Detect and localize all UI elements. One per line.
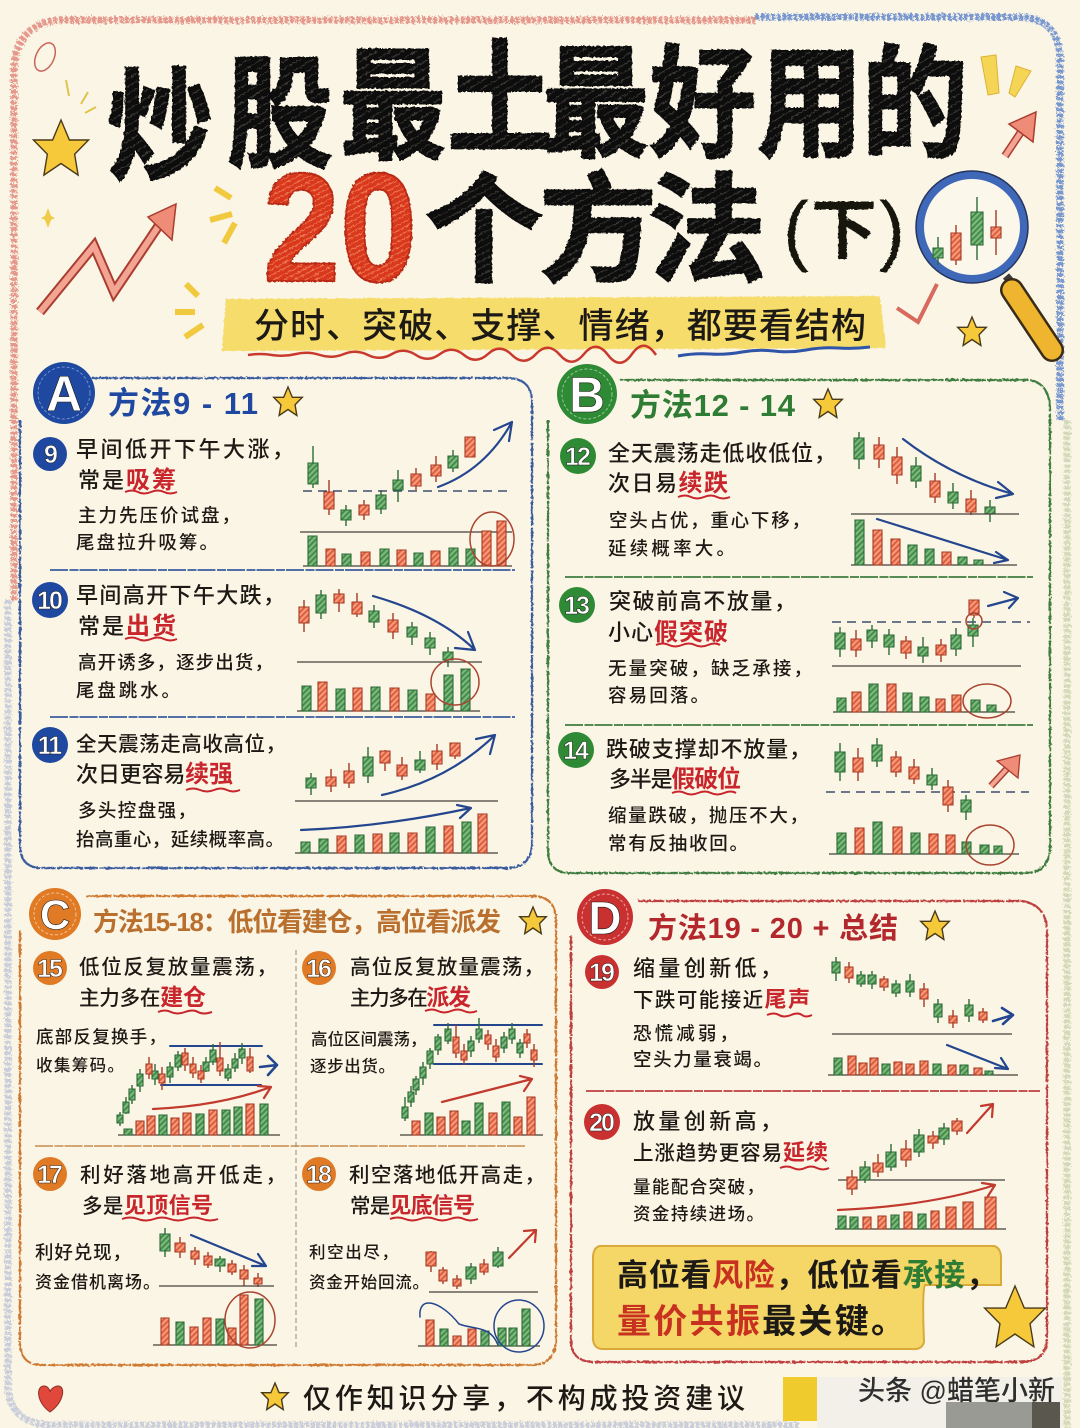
method 17: 利好兑现， — [35, 1242, 131, 1263]
method 14: 跌破支撑却不放量， — [606, 737, 811, 762]
method 15: 低位反复放量震荡， — [79, 956, 277, 979]
badge D — [577, 889, 633, 945]
method 18 — [302, 1157, 545, 1352]
icon: red arrow upper right — [1005, 112, 1036, 156]
panel B — [548, 364, 1050, 873]
candlestick chart 9 — [300, 422, 514, 566]
method 14: 缩量跌破，抛压不大， — [608, 805, 808, 826]
method 12 — [560, 432, 1019, 565]
title line 1: 炒股最土最好用的 — [107, 34, 968, 197]
method 17: 利好落地高开低走， — [80, 1164, 286, 1187]
method 9: 早间低开下午大涨， — [76, 437, 294, 462]
callout line 2: 量价共振最关键。 — [617, 1303, 905, 1341]
candlestick chart 10 — [297, 589, 482, 711]
method 12: 全天震荡走低收低位， — [608, 441, 836, 466]
candlestick chart 13 — [832, 592, 1030, 718]
panel D — [571, 889, 1047, 1362]
title block — [107, 34, 968, 314]
method 20: 资金持续进场。 — [633, 1204, 764, 1224]
method 15: 收集筹码。 — [36, 1056, 124, 1075]
method 9: 9 — [44, 441, 57, 469]
decorations left — [31, 40, 235, 337]
callout line 1: 高位看风险，低位看承接， — [617, 1258, 997, 1293]
method 19: 缩量创新低， — [633, 956, 782, 981]
method 17: 17 — [37, 1161, 62, 1189]
method 17 — [33, 1157, 286, 1348]
panel B heading: 方法12 - 14 — [630, 388, 796, 423]
method 9 — [33, 422, 514, 566]
title suffix: ( — [783, 185, 809, 273]
candlestick chart 17 — [153, 1228, 277, 1348]
method 12: 次日易续跌 — [608, 470, 728, 497]
icon: heart — [39, 1386, 63, 1412]
candlestick chart 19 — [828, 957, 1018, 1075]
title line 2: 个方法 — [425, 166, 766, 298]
method 18: 18 — [306, 1161, 332, 1189]
method 10: 高开诱多，逐步出货， — [78, 652, 273, 673]
panel C — [20, 888, 556, 1365]
method 10: 常是出货 — [78, 613, 176, 640]
method 16: 逐步出货。 — [310, 1057, 395, 1076]
method 20: 20 — [589, 1109, 614, 1137]
badge B — [557, 364, 617, 424]
star — [814, 389, 842, 418]
method 10 — [32, 582, 482, 711]
title suffix: 下 — [811, 193, 877, 267]
method 18: 利空出尽， — [309, 1243, 398, 1262]
icon: star left — [33, 120, 89, 175]
method 13: 小心假突破 — [608, 619, 728, 646]
watermark — [783, 1376, 1062, 1428]
icon: magnifying glass — [916, 171, 1052, 350]
method 10: 尾盘跳水。 — [76, 680, 180, 701]
method 15: 主力多在建仓 — [79, 984, 206, 1010]
method 14: 14 — [563, 737, 589, 765]
method 10: 早间高开下午大跌， — [76, 583, 285, 608]
method 11: 全天震荡走高收高位， — [76, 733, 286, 756]
candlestick chart 14 — [826, 738, 1029, 865]
badge B: B — [569, 367, 605, 423]
method 15: 底部反复换手， — [36, 1027, 166, 1047]
method 13: 突破前高不放量， — [609, 589, 796, 614]
footer note: 仅作知识分享，不构成投资建议 — [303, 1383, 745, 1414]
method 20: 量能配合突破， — [633, 1177, 764, 1197]
subtitle text: 分时、突破、支撑、情绪，都要看结构 — [254, 307, 866, 346]
method 20: 上涨趋势更容易延续 — [633, 1140, 828, 1165]
method 19: 恐慌减弱， — [633, 1023, 738, 1044]
method 11 — [32, 727, 498, 853]
method 15: 15 — [37, 955, 63, 983]
icon: check mark — [897, 284, 937, 322]
method 13 — [559, 587, 1030, 718]
method 11: 多头控盘强， — [78, 800, 196, 821]
title suffix: ) — [879, 185, 905, 273]
method 13: 13 — [564, 592, 589, 620]
candlestick chart 12 — [851, 432, 1019, 565]
candlestick chart 15 — [117, 1042, 280, 1135]
icon: big star — [985, 1286, 1045, 1347]
method 11: 11 — [38, 732, 62, 760]
method 16: 16 — [306, 955, 331, 983]
method 17: 多是见顶信号 — [82, 1193, 213, 1218]
badge A — [33, 362, 95, 424]
method 16 — [302, 951, 544, 1135]
title number 20: 20 — [263, 141, 417, 314]
method 16: 高位反复放量震荡， — [350, 956, 544, 979]
method 14: 多半是假破位 — [609, 765, 741, 793]
decorations right — [897, 55, 1052, 350]
method 12: 空头占优，重心下移， — [609, 510, 810, 531]
badge C — [29, 888, 81, 940]
method 13: 容易回落。 — [608, 685, 709, 706]
badge A: A — [46, 366, 82, 422]
method 9: 尾盘拉升吸筹。 — [76, 532, 218, 553]
method 19 — [585, 955, 1018, 1075]
method 10: 10 — [37, 587, 62, 615]
method 12: 延续概率大。 — [608, 538, 735, 559]
panel A — [20, 362, 532, 868]
method 11: 抬高重心，延续概率高。 — [76, 829, 284, 850]
method 14: 常有反抽收回。 — [608, 833, 748, 854]
method 16: 高位区间震荡， — [311, 1029, 426, 1049]
watermark: 头条 @蜡笔小新 — [858, 1376, 1055, 1406]
method 12: 12 — [565, 443, 590, 471]
panel C heading: 方法15-18：低位看建仓，高位看派发 — [93, 907, 501, 937]
method 18: 利空落地低开高走， — [349, 1164, 545, 1187]
candlestick chart 18 — [418, 1230, 544, 1352]
method 16: 主力多在派发 — [350, 984, 471, 1010]
star — [520, 907, 546, 934]
method 11: 次日更容易续强 — [76, 761, 233, 788]
summary callout — [593, 1246, 1001, 1349]
method 14 — [558, 732, 1029, 865]
method 20 — [584, 1104, 1006, 1229]
method 18: 常是见底信号 — [350, 1193, 475, 1218]
star — [274, 387, 302, 416]
method 19: 下跌可能接近尾声 — [633, 987, 810, 1012]
panel D heading: 方法19 - 20 + 总结 — [648, 912, 898, 945]
panel A heading: 方法9 - 11 — [108, 386, 258, 421]
method 20: 放量创新高， — [633, 1109, 782, 1134]
method 15 — [33, 951, 280, 1135]
subtitle banner — [222, 296, 886, 363]
method 9: 主力先压价试盘， — [78, 505, 240, 526]
method 19: 空头力量衰竭。 — [633, 1049, 772, 1070]
icon: footer star — [262, 1383, 288, 1410]
method 9: 常是吸筹 — [78, 467, 176, 494]
method 13: 无量突破，缺乏承接， — [608, 658, 812, 679]
icon: red zigzag arrow — [40, 204, 176, 312]
candlestick chart 16 — [400, 1018, 543, 1135]
candlestick chart 20 — [835, 1104, 1006, 1229]
candlestick chart 11 — [295, 735, 498, 853]
method 19: 19 — [589, 959, 614, 987]
badge C: C — [40, 891, 70, 938]
icon: star small — [958, 317, 986, 346]
badge D: D — [588, 892, 622, 944]
method 17: 资金借机离场。 — [35, 1272, 160, 1292]
method 18: 资金开始回流。 — [309, 1272, 429, 1292]
star — [921, 911, 949, 940]
